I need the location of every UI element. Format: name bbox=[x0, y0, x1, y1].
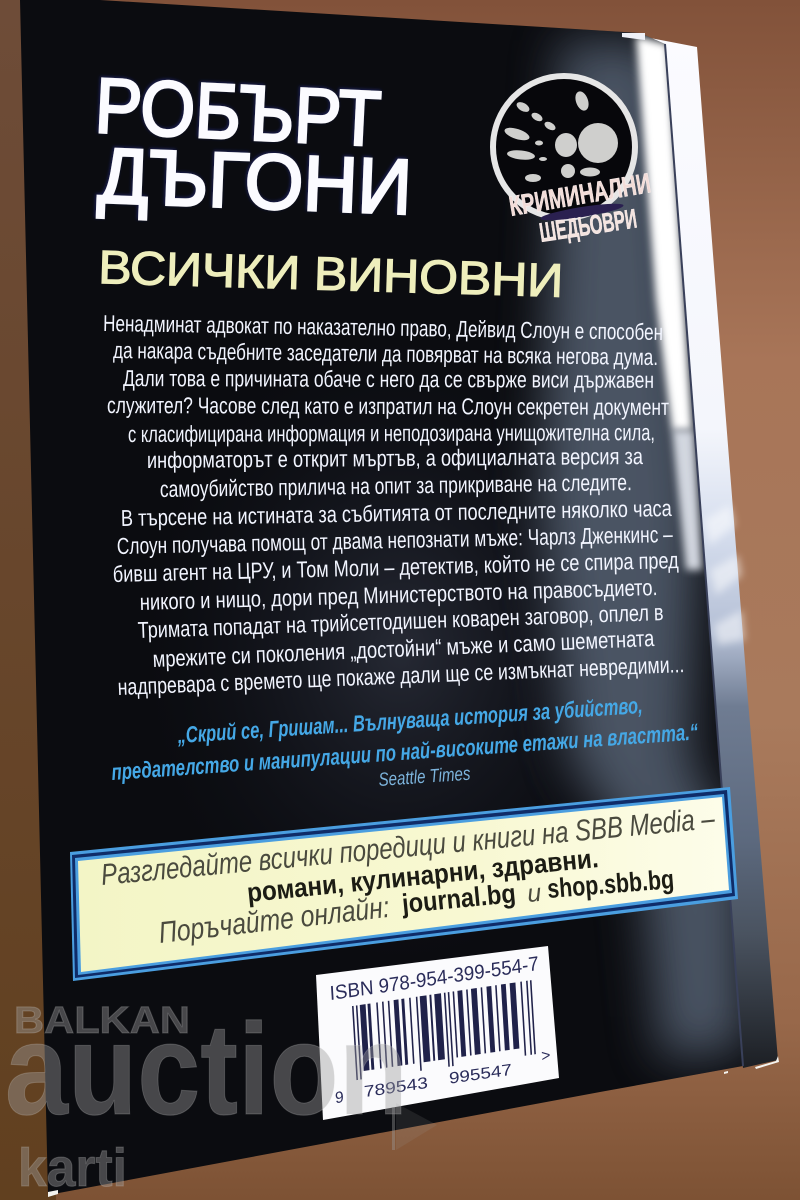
series name bottom line: ШЕДЬОВРИ bbox=[537, 203, 639, 248]
synopsis text: мрежите си поколения „достойни“ мъже и само шеметната bbox=[152, 625, 655, 672]
watermark auction: auction bbox=[5, 996, 408, 1142]
darker wood on the left bbox=[0, 0, 56, 1200]
watermark karti: karti bbox=[18, 1138, 127, 1198]
promo box: journal.bg bbox=[400, 878, 517, 919]
quote source: Seattle Times bbox=[378, 764, 472, 791]
label contents: > bbox=[541, 1047, 551, 1065]
badge ring bbox=[493, 76, 635, 218]
ISBN barcode label bbox=[316, 946, 559, 1120]
label contents bbox=[328, 952, 552, 1107]
banner swoosh bbox=[540, 200, 624, 224]
label background bbox=[316, 946, 559, 1120]
synopsis text bbox=[103, 310, 685, 700]
cover glare bbox=[242, 28, 742, 1080]
fold line bbox=[665, 44, 743, 1066]
promo box: Поръчайте онлайн: bbox=[157, 891, 391, 950]
white highlight along the fold bbox=[636, 36, 692, 430]
synopsis text: Тримата попадат на трийсетгодишен коварен заговор, оплел в bbox=[137, 599, 664, 643]
spine highlight streaks bbox=[704, 505, 745, 645]
grey wash along the fold bbox=[540, 40, 745, 1060]
watermark bbox=[5, 996, 437, 1198]
synopsis text: самоубийство прилича на опит за прикриване на следите. bbox=[160, 469, 632, 502]
promo box: shop.sbb.bg bbox=[546, 864, 675, 904]
handprint palm and fingers bbox=[503, 90, 618, 182]
series name top line: КРИМИНАЛНИ bbox=[507, 167, 653, 222]
author first name: РОБЪРТ bbox=[93, 61, 383, 163]
promo box bbox=[70, 787, 738, 981]
label contents: 995547 bbox=[449, 1062, 512, 1088]
box fill bbox=[78, 797, 729, 972]
promo box: и bbox=[526, 879, 542, 908]
ISBN number: ISBN 978-954-399-554-7 bbox=[329, 953, 539, 1005]
worn white chips on the lower edge bbox=[48, 1056, 779, 1197]
book title: ВСИЧКИ ВИНОВНИ bbox=[98, 240, 564, 307]
label contents: 789543 bbox=[364, 1075, 429, 1101]
synopsis text: В търсене на истината за събитията от последните няколко часа bbox=[121, 495, 672, 531]
series logo: handprint badge bbox=[493, 76, 653, 248]
smaller highlight patch bbox=[672, 430, 702, 570]
synopsis text: информаторът е открит мъртъв, а официалната версия за bbox=[147, 443, 643, 473]
box borders bbox=[70, 787, 738, 981]
spine page strip bbox=[640, 36, 778, 1068]
watermark BALKAN: BALKAN bbox=[14, 1000, 190, 1042]
barcode digits: 9 bbox=[335, 1089, 344, 1107]
author name bbox=[93, 61, 413, 231]
centre sheen bbox=[242, 455, 546, 826]
promo box: романи, кулинарни, здравни. bbox=[246, 843, 600, 908]
author surname: ДЪГОНИ bbox=[96, 131, 413, 231]
watermark cursor arrow bbox=[392, 1103, 437, 1150]
synopsis text: никого и нищо, дори пред Министерството на правосъдието. bbox=[139, 574, 658, 615]
barcode bars bbox=[352, 980, 536, 1080]
cover top edge tip bbox=[622, 33, 645, 40]
